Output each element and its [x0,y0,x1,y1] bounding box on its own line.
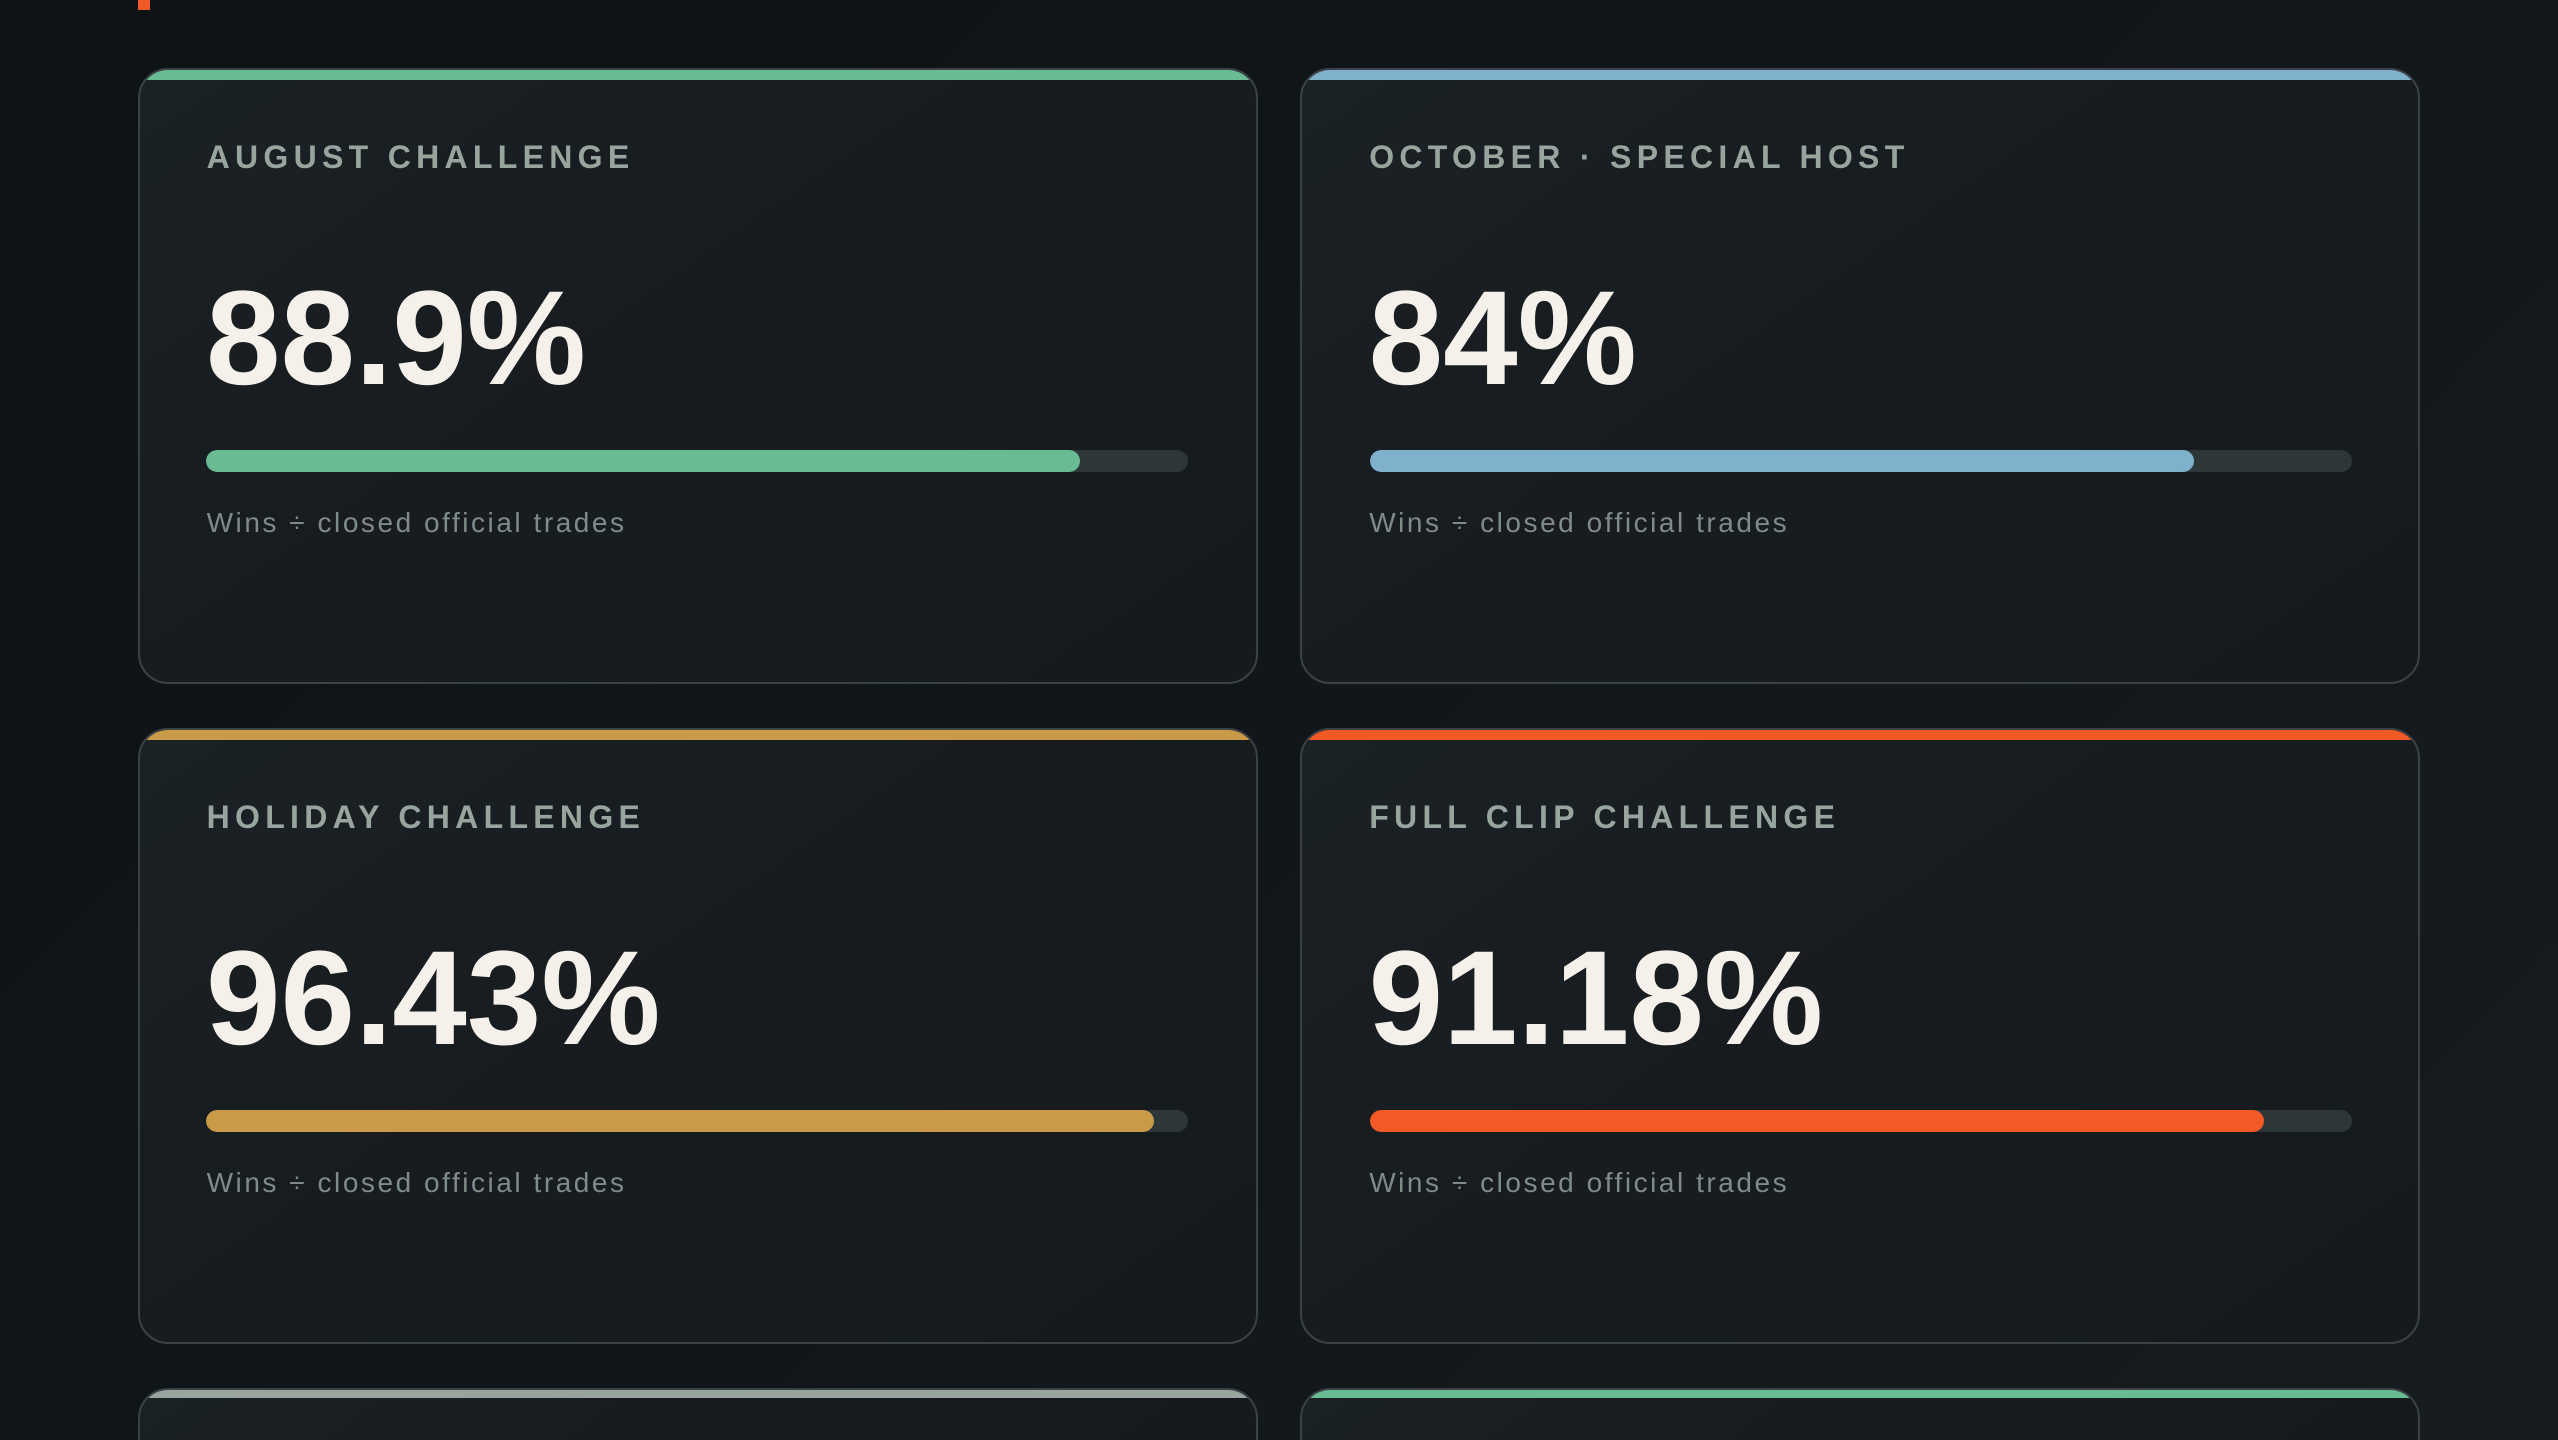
card accent strip: green [1303,1388,2418,1398]
card accent strip: orange [1303,729,2418,739]
card accent strip: grey [140,1388,1256,1398]
progress bar 96.43% [207,1110,1189,1132]
progress bar 84% [1369,450,2351,472]
card heading: OCTOBER · SPECIAL HOST [1369,142,1910,176]
panel: cropped card, grey accent [138,1387,1258,1440]
progress bar 91.18% [1369,1110,2351,1132]
panel: October Special Host [1301,68,2420,684]
caption: Wins ÷ closed official trades [207,1167,627,1199]
card heading: HOLIDAY CHALLENGE [207,802,645,836]
caption: Wins ÷ closed official trades [1369,1167,1789,1199]
win rate value: 84% [1369,263,1637,413]
caption: Wins ÷ closed official trades [1369,507,1789,539]
win rate value: 96.43% [206,923,660,1073]
panel: cropped card, green accent [1301,1387,2420,1440]
progress bar 88.9% [207,450,1189,472]
card accent strip: gold [140,729,1256,739]
card accent strip: blue [1303,69,2418,79]
win rate value: 91.18% [1369,923,1823,1073]
card heading: AUGUST CHALLENGE [207,142,635,176]
panel: Full Clip Challenge [1301,728,2420,1344]
win rate value: 88.9% [206,263,586,413]
card heading: FULL CLIP CHALLENGE [1369,802,1840,836]
panel: Holiday Challenge [138,728,1258,1344]
heading accent mark [138,0,150,10]
panel: August Challenge [138,68,1258,684]
card accent strip: green [140,69,1256,79]
caption: Wins ÷ closed official trades [207,507,627,539]
